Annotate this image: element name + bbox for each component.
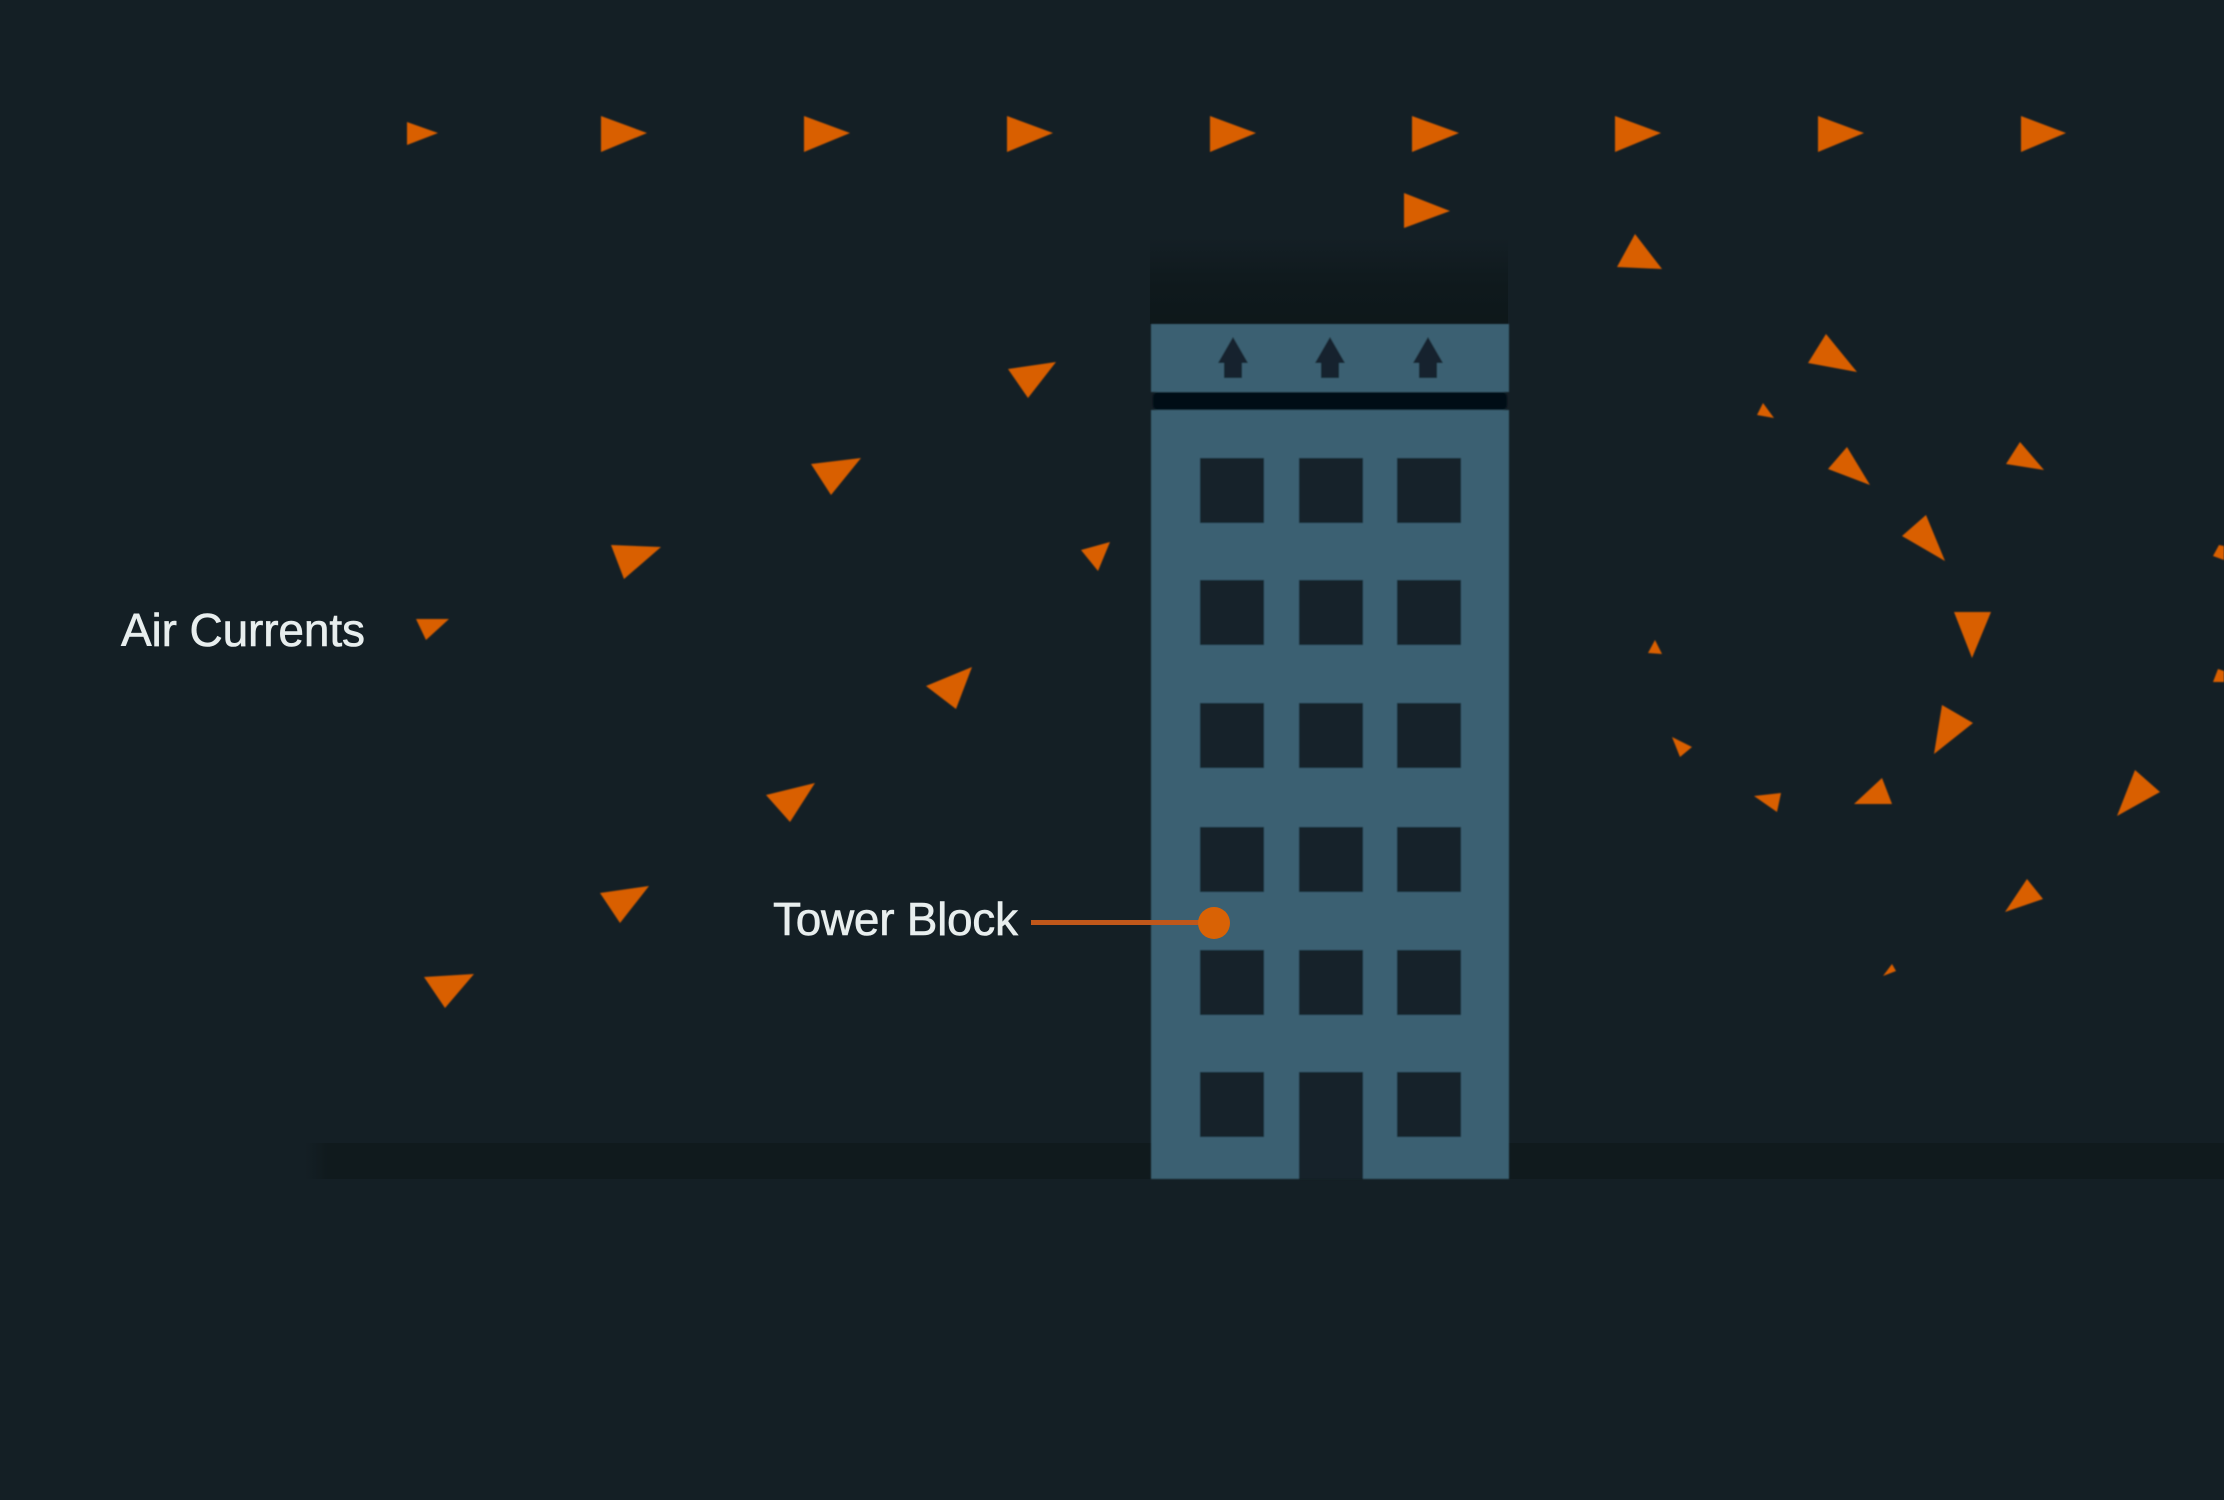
tower body (1151, 410, 1509, 1179)
air current triangles: rising diagonal on the left (416, 362, 1110, 1008)
label: Air Currents: Air Currents (121, 604, 365, 656)
ground shadow strip (305, 1143, 2224, 1179)
air current triangles: turbulent swirl on the right (1617, 234, 2224, 976)
icon: upward vent arrows (1218, 337, 1443, 378)
shadow above tower roof (1150, 238, 1508, 324)
door (1299, 1072, 1363, 1179)
window grid (1200, 458, 1461, 1137)
roof vent band (1151, 324, 1509, 392)
label: Tower Block: Tower Block (773, 893, 1019, 945)
callout leader line and dot (1031, 907, 1230, 939)
dark roof gap (1153, 392, 1507, 410)
air current triangles: straight top row (407, 116, 2066, 228)
tower block building (1151, 324, 1509, 1179)
